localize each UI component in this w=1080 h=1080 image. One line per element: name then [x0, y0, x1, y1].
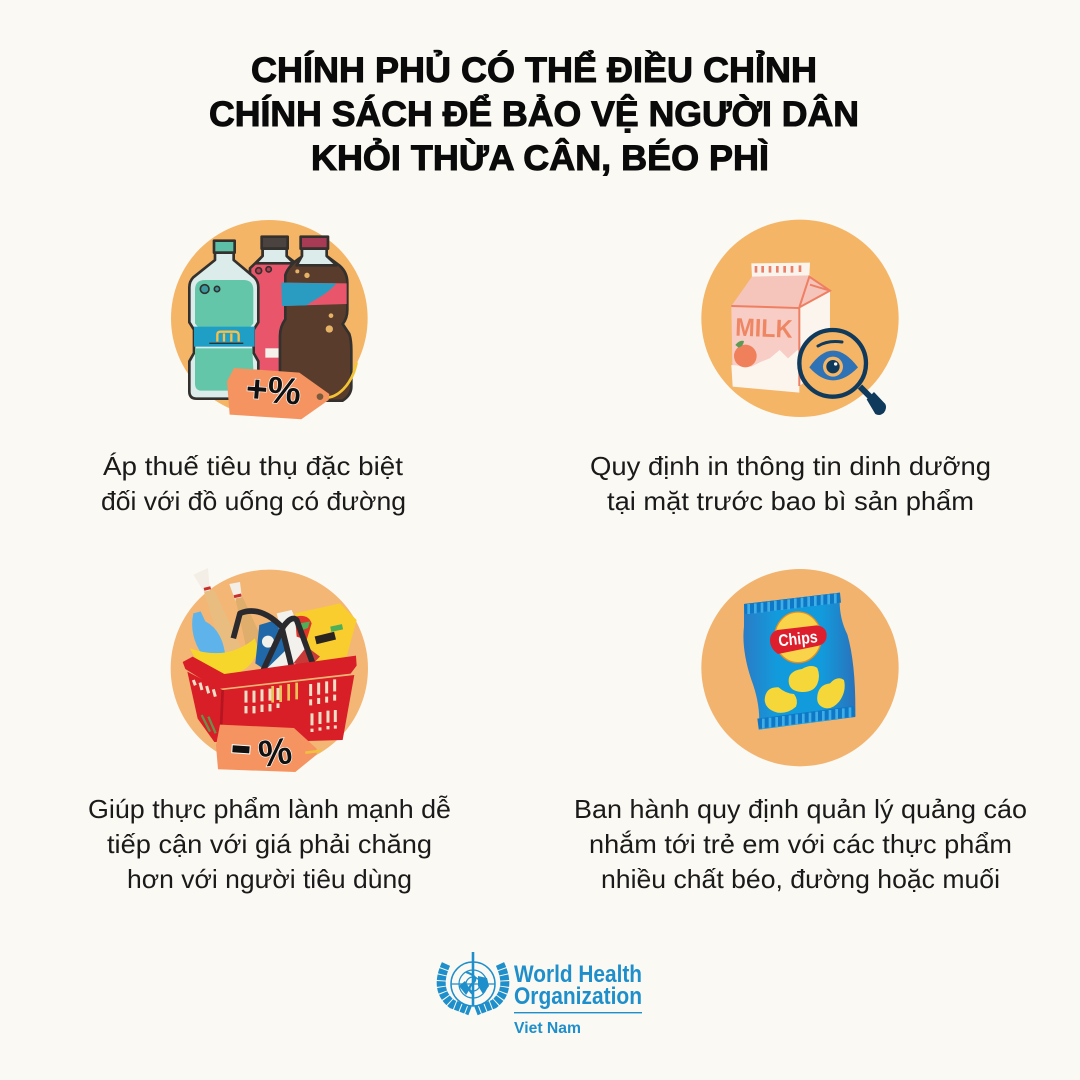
icon: chips bag — [701, 569, 899, 766]
text: sugary drink tax — [101, 451, 406, 516]
logo: World Health Organization Viet Nam: World Health — [514, 961, 642, 988]
icon: WHO emblem — [441, 952, 505, 1011]
title: CHÍNH PHỦ CÓ THỂ ĐIỀU CHỈNH — [251, 50, 817, 90]
title: CHÍNH SÁCH ĐỂ BẢO VỆ NGƯỜI DÂN — [209, 94, 859, 134]
logo: World Health Organization Viet Nam — [441, 952, 642, 1037]
text: sugary drink tax: đối với đồ uống có đường — [101, 486, 406, 516]
logo: World Health Organization Viet Nam: Viet Nam — [514, 1020, 581, 1037]
icon: milk carton with magnifying eye: MILK — [735, 314, 794, 344]
text: affordable healthy food: hơn với người tiêu dùng — [127, 864, 412, 894]
text: front of pack labelling — [590, 451, 991, 516]
title — [209, 50, 859, 178]
icon: grocery basket with discount tag: % — [256, 729, 294, 775]
text: affordable healthy food — [88, 794, 451, 894]
text: affordable healthy food: tiếp cận với giá phải chăng — [107, 829, 432, 859]
text: front of pack labelling: Quy định in thông tin dinh dưỡng — [590, 451, 991, 481]
text: sugary drink tax: Áp thuế tiêu thụ đặc biệt — [103, 451, 404, 481]
icon: milk carton with magnifying eye — [701, 220, 899, 417]
text: marketing regulation: nhiều chất béo, đường hoặc muối — [601, 864, 1000, 894]
text: marketing regulation: nhắm tới trẻ em với các thực phẩm — [589, 829, 1012, 859]
icon: soft drink bottles with tax tag: +% — [245, 367, 302, 413]
icon: soft drink bottles with tax tag — [171, 220, 368, 419]
logo: World Health Organization Viet Nam: Organization — [514, 983, 642, 1010]
title: KHỎI THỪA CÂN, BÉO PHÌ — [311, 138, 769, 178]
text: marketing regulation: Ban hành quy định quản lý quảng cáo — [574, 794, 1027, 824]
icon: grocery basket with discount tag — [171, 568, 368, 775]
text: affordable healthy food: Giúp thực phẩm lành mạnh dễ — [88, 794, 451, 824]
icon: chips bag: Chips — [777, 627, 819, 650]
text: marketing regulation — [574, 794, 1027, 894]
text: front of pack labelling: tại mặt trước bao bì sản phẩm — [607, 486, 974, 516]
